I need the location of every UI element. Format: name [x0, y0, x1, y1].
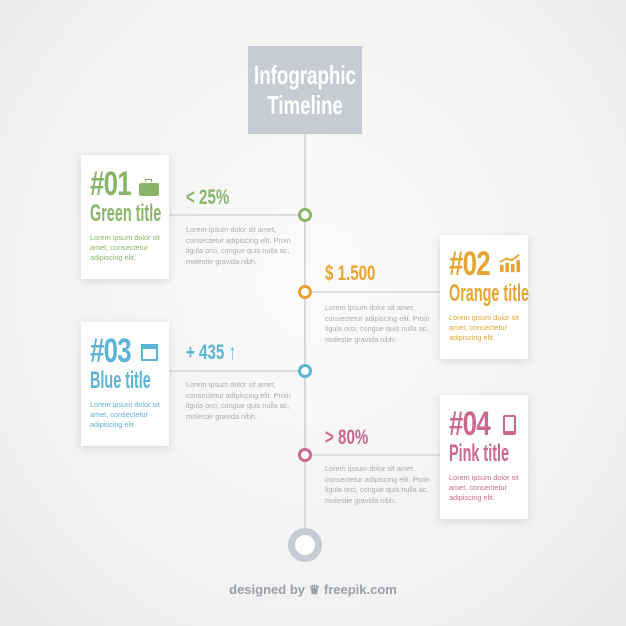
connector pink [305, 454, 440, 456]
value orange: $ 1.500 [325, 262, 375, 285]
title: Orange title [449, 280, 529, 307]
icon: calendar [141, 344, 158, 361]
title: Pink title [449, 440, 509, 467]
title: Green title [90, 200, 161, 227]
icon: phone [503, 415, 516, 435]
panel: green [81, 155, 169, 279]
value pink: > 80% [325, 426, 368, 449]
text green: Lorem ipsum dolor sit amet, consectetur adipiscing elit. Proin ligula orci, congue quis nulla ac, molestie gravida nibh. [186, 225, 291, 266]
dot blue [298, 364, 312, 378]
vertical timeline line [304, 134, 306, 530]
dot pink [298, 448, 312, 462]
connector orange [305, 291, 440, 293]
title box: Infographic [254, 60, 356, 90]
text pink: Lorem ipsum dolor sit amet, consectetur adipiscing elit. Proin ligula orci, congue quis nulla ac, molestie gravida nibh. [325, 464, 430, 504]
connector green [169, 214, 305, 216]
icon: briefcase [139, 183, 159, 196]
panel: pink [440, 395, 528, 519]
panel: blue [81, 322, 169, 446]
footer credit: designed by ♛ freepik.com [229, 582, 397, 597]
text: Lorem ipsum dolor sit amet, consectetur adipiscing elit. [90, 233, 160, 262]
dot orange [298, 285, 312, 299]
text: Lorem ipsum dolor sit amet, consectetur adipiscing elit. [90, 400, 160, 429]
text orange: Lorem ipsum dolor sit amet, consectetur adipiscing elit. Proin ligula orci, congue quis nulla ac, molestie gravida nibh. [325, 303, 430, 344]
heading #03: #03 [90, 332, 131, 370]
connector blue [169, 370, 305, 372]
text blue: Lorem ipsum dolor sit amet, consectetur adipiscing elit. Proin ligula orci, congue quis nulla ac, molestie gravida nibh. [186, 380, 291, 420]
title box: Timeline [267, 90, 343, 120]
title box [248, 46, 362, 134]
heading #01: #01 [90, 165, 131, 203]
end circle [288, 528, 322, 562]
title: Blue title [90, 367, 151, 394]
heading #04: #04 [449, 405, 490, 443]
value green: < 25% [186, 186, 229, 209]
value blue: + 435 ↑ [186, 341, 236, 364]
text: Lorem ipsum dolor sit amet, consectetur adipiscing elit. [449, 313, 519, 342]
text: Lorem ipsum dolor sit amet, consectetur adipiscing elit. [449, 473, 519, 502]
icon: bar chart [500, 254, 520, 272]
panel: orange [440, 235, 528, 359]
heading #02: #02 [449, 245, 490, 283]
dot green [298, 208, 312, 222]
